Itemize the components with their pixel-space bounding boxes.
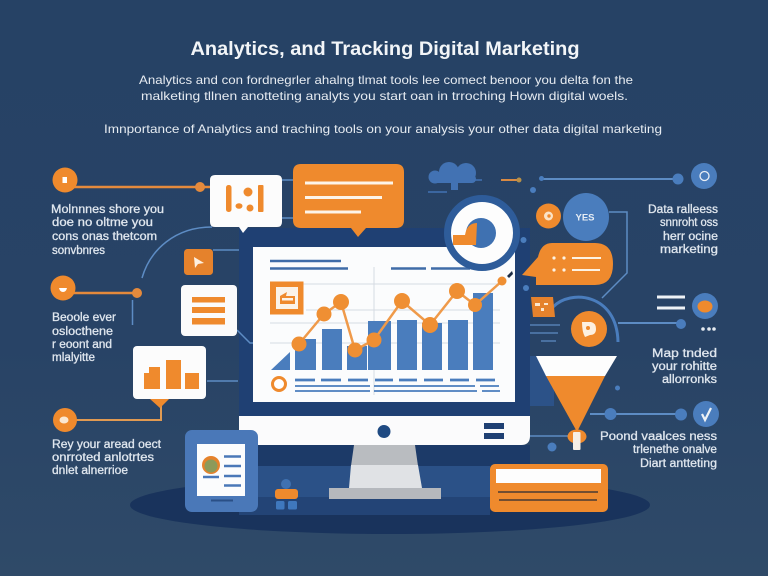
tablet xyxy=(185,430,258,512)
left text 1: cons onas thetcom xyxy=(52,231,157,243)
chin buttons xyxy=(484,423,504,439)
badge: YES: YES xyxy=(575,213,595,224)
icon: magnifier with pie chart xyxy=(448,198,516,268)
right text 3: Poond vaalces ness xyxy=(600,431,717,443)
icon: cloud xyxy=(428,162,482,192)
camera dot xyxy=(378,425,390,438)
computer monitor xyxy=(239,228,530,515)
right text 1: snnroht oss xyxy=(660,217,718,229)
right text 3: Diart antteting xyxy=(640,458,717,470)
icon: blue circle with orange xyxy=(692,293,718,319)
left item 3 xyxy=(52,405,162,477)
left text 3: Rey your aread oect xyxy=(52,439,162,451)
right item 1 xyxy=(539,163,718,256)
card: list icon xyxy=(181,285,237,336)
left text 2: oslocthene xyxy=(52,326,113,338)
chart footer xyxy=(272,378,500,391)
right text 1: marketing xyxy=(660,244,718,256)
left text 1: sonvbnres xyxy=(52,245,105,257)
monitor stand xyxy=(329,445,441,499)
right text 2 xyxy=(652,348,717,386)
header lines xyxy=(270,261,470,268)
icon: orange circle xyxy=(50,276,76,300)
arrow: orange connector xyxy=(501,178,522,182)
left text 1: doe no oltme you xyxy=(52,217,153,229)
left text 2: r eoont and xyxy=(52,339,112,351)
dashboard screen xyxy=(253,247,515,402)
icon: orange circle xyxy=(53,408,77,432)
icon: orange flag tile xyxy=(184,249,213,275)
right text 1 xyxy=(648,204,718,256)
icon: orange circle xyxy=(52,168,78,192)
title: Analytics, and Tracking Digital Marketing xyxy=(190,39,580,60)
intro paragraph: malketing tllnen anotteting analyts you start oan in trroching Hown digital woels. xyxy=(141,89,628,103)
connector lines xyxy=(132,180,627,436)
monitor bezel xyxy=(239,228,530,418)
subheading: Imnportance of Analytics and traching tools on your analysis your other data digital marketing xyxy=(104,122,662,136)
left text 3: dnlet alnerrioe xyxy=(52,465,128,477)
icon: orange play circle xyxy=(571,311,607,347)
speech bubble: orange text xyxy=(293,164,404,237)
orange widget xyxy=(270,282,304,314)
bar chart xyxy=(271,293,493,370)
right text 2: Map tnded xyxy=(652,348,717,360)
left text 3 xyxy=(52,439,162,477)
intro paragraph: Analytics and con fordnegrler ahalng tlmat tools lee comect benoor you delta fon the xyxy=(139,73,633,87)
badge: YES xyxy=(563,193,609,241)
arc connector xyxy=(553,297,618,342)
icon: small orange tile xyxy=(531,297,555,317)
left item 1 xyxy=(51,168,210,257)
icon: orange badge xyxy=(536,204,561,228)
icon: blue check circle xyxy=(693,401,719,427)
card: column icon xyxy=(210,175,282,233)
right text 3 xyxy=(600,431,717,470)
right text 1: Data ralleess xyxy=(648,204,718,216)
left text 2: mlalyitte xyxy=(52,352,95,364)
decorative dots xyxy=(520,187,620,452)
speech bubble: orange list xyxy=(522,243,613,285)
platform ellipse xyxy=(130,476,650,534)
right text 2: your rohitte xyxy=(652,361,717,373)
right item 2 xyxy=(618,293,718,386)
intro paragraph xyxy=(139,73,633,103)
orange card xyxy=(490,464,608,512)
left text 2: Beoole ever xyxy=(52,312,116,324)
left text 1: Molnnnes shore you xyxy=(51,204,164,216)
right text 3: trlenethe onalve xyxy=(633,444,717,456)
icon: person xyxy=(275,479,298,510)
monitor chin xyxy=(239,416,530,445)
left text 2 xyxy=(52,312,116,364)
left text 1 xyxy=(51,204,164,257)
right text 1: herr ocine xyxy=(663,231,718,243)
line chart xyxy=(292,271,513,358)
icon: blue ring circle xyxy=(691,163,717,189)
left text 3: onrroted anlotrtes xyxy=(52,452,154,464)
card: mini bar chart xyxy=(133,346,206,408)
right item 3 xyxy=(590,401,719,470)
funnel xyxy=(530,356,617,450)
left item 2 xyxy=(50,276,142,364)
small lines xyxy=(530,325,560,341)
right text 2: allorronks xyxy=(662,374,717,386)
